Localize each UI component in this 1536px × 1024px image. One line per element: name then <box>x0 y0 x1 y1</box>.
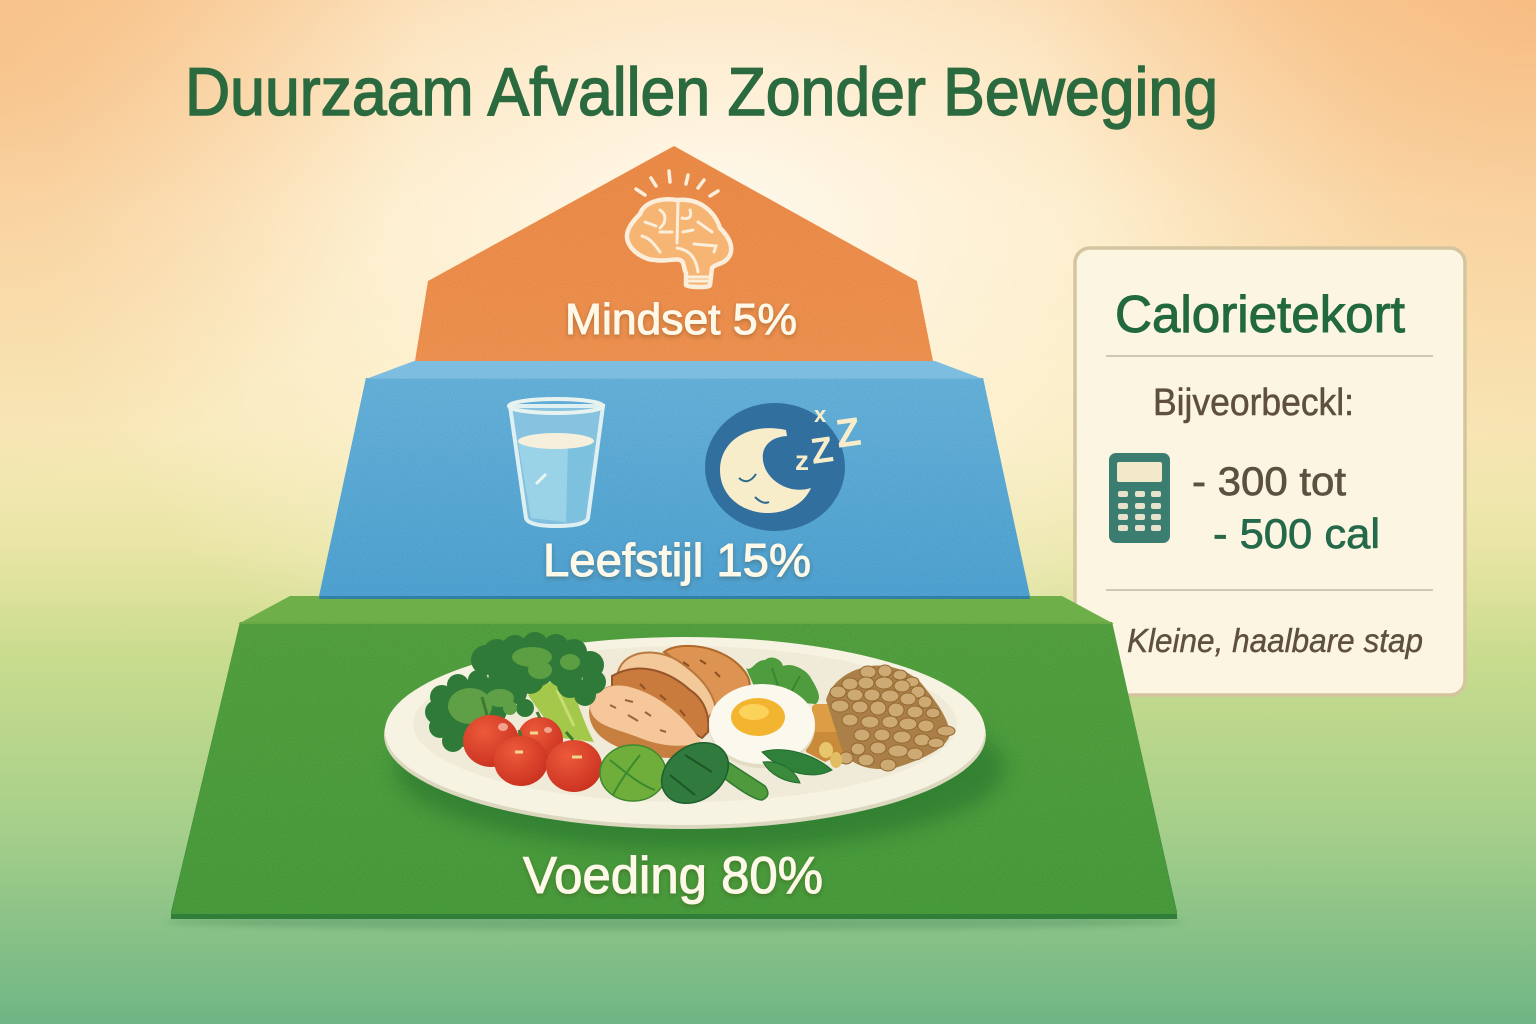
food: lettuce <box>746 658 819 704</box>
food: green vegetables <box>600 730 832 816</box>
value: 300 tot: - 300 tot <box>1192 460 1346 504</box>
example label: Bijveorbeckl: <box>1153 382 1354 424</box>
icon: water glass <box>509 399 603 526</box>
panel: voeding tier <box>164 596 1184 930</box>
icon: moon with zzz <box>705 402 864 531</box>
title: Duurzaam Afvallen Zonder Beweging <box>185 54 1218 130</box>
tier body <box>415 146 933 361</box>
icon: brain with lightbulb <box>627 171 731 287</box>
panel: mindset tier <box>415 146 933 361</box>
food: egg <box>709 684 815 768</box>
plate shadow <box>395 686 1005 850</box>
icon: moon with zzz: z <box>795 445 809 476</box>
icon: moon with zzz: x <box>814 402 827 427</box>
panel: leefstijl tier <box>319 361 1030 599</box>
icon: calculator <box>1109 453 1170 543</box>
icon: moon with zzz: Z <box>833 410 864 457</box>
icon: moon with zzz: Z <box>808 428 836 472</box>
tier label: Voeding 80% <box>523 847 823 905</box>
tier label: Leefstijl 15% <box>543 534 811 586</box>
panel: calorietekort <box>1075 248 1465 695</box>
tier body <box>319 378 1030 599</box>
food: broccoli front <box>425 670 534 752</box>
food: bread slices <box>589 646 750 758</box>
tier top face <box>238 596 1114 624</box>
card heading: Calorietekort <box>1115 286 1406 344</box>
tier body <box>171 622 1177 919</box>
tier top face <box>366 361 983 379</box>
food: broccoli back <box>471 632 606 742</box>
tier label: Mindset 5% <box>565 295 797 344</box>
plate <box>384 637 986 829</box>
food: tomatoes <box>463 697 602 792</box>
ground shadow <box>164 914 1184 930</box>
card footer: Kleine, haalbare stap <box>1127 622 1423 659</box>
card background <box>1075 248 1465 695</box>
value: 500 cal: - 500 cal <box>1213 510 1380 557</box>
food: grains <box>806 665 955 771</box>
